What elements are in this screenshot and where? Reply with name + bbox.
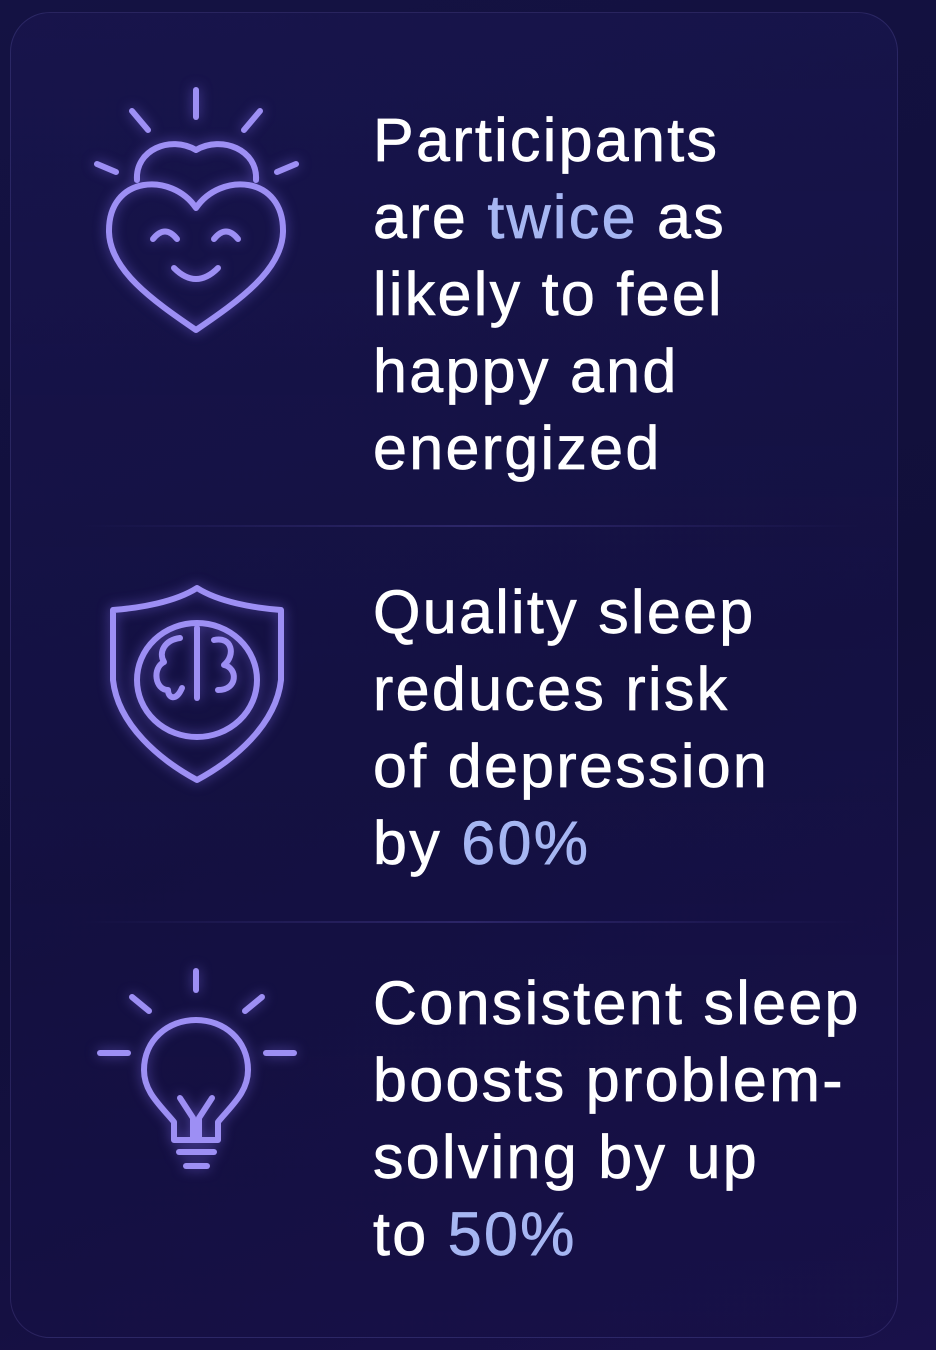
icon: lightbulb xyxy=(100,971,294,1166)
text: depression stat xyxy=(373,578,769,877)
text: depression stat: Quality sleep xyxy=(373,578,756,646)
text: happy stat xyxy=(373,106,726,482)
text: happy stat: energized xyxy=(373,414,662,482)
text: problem-solving stat: solving by up xyxy=(373,1123,759,1191)
text: problem-solving stat: Consistent sleep xyxy=(373,969,861,1037)
text: happy stat: likely to feel xyxy=(373,260,724,328)
icon: happy heart xyxy=(97,90,296,330)
text: happy stat: Participants xyxy=(373,106,719,174)
text: happy stat: are twice as xyxy=(373,183,726,251)
text: problem-solving stat xyxy=(373,969,861,1268)
text: depression stat: of depression xyxy=(373,732,769,800)
text: problem-solving stat: boosts problem- xyxy=(373,1046,845,1114)
icon: shield brain xyxy=(113,588,281,780)
text: depression stat: reduces risk xyxy=(373,655,729,723)
text: depression stat: by 60% xyxy=(373,809,590,877)
text: problem-solving stat: to 50% xyxy=(373,1200,577,1268)
text: happy stat: happy and xyxy=(373,337,679,405)
